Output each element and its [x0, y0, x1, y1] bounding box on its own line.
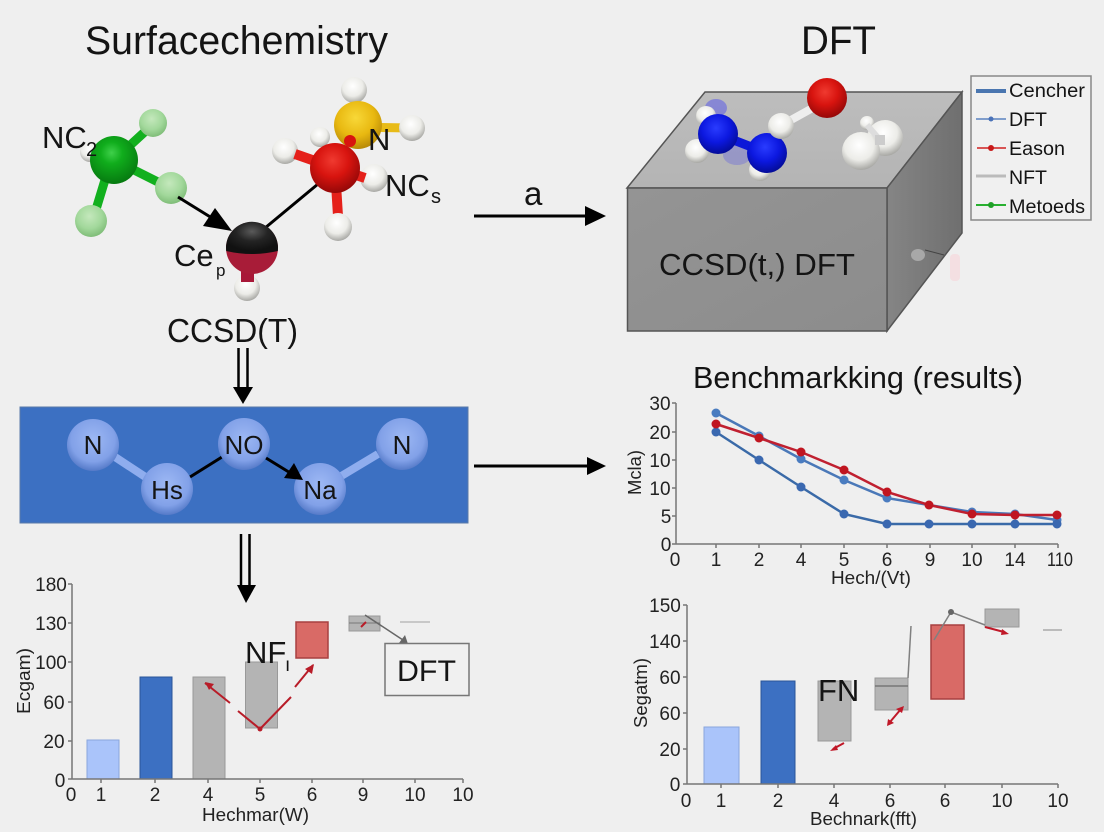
x tick labels: 10 — [404, 785, 426, 806]
faint pink mark — [950, 254, 960, 281]
red arrows: from bar 5 — [205, 622, 366, 732]
y tick labels: 60 — [659, 704, 681, 725]
x tick labels: 4 — [203, 785, 214, 806]
label: NCs: NC — [385, 168, 430, 203]
x tick labels: 2 — [754, 550, 764, 571]
x tick labels: 0 — [670, 550, 680, 571]
y tick labels: 30 — [649, 394, 671, 415]
atom: N — [376, 418, 428, 470]
title: Surfacechemistry: Surfacechemistry — [85, 19, 388, 63]
y tick labels: 20 — [659, 740, 681, 761]
line chart: benchmarking results — [625, 394, 1073, 588]
bar chart: Bechnark — [631, 596, 1069, 829]
axes — [683, 605, 1058, 788]
atom: NO: NO — [224, 430, 264, 460]
y tick labels: 0 — [670, 775, 680, 796]
label: Cep: Ce — [174, 238, 214, 273]
y tick labels: 60 — [43, 693, 65, 714]
y tick labels: 5 — [661, 507, 671, 528]
y tick labels: 10 — [649, 451, 671, 472]
legend item: Metoeds — [976, 197, 1085, 218]
atom: NO — [218, 418, 270, 470]
legend — [971, 76, 1091, 220]
y tick labels — [35, 575, 67, 792]
molecule: surface chemistry ball-and-stick — [75, 77, 425, 301]
arrow: a, to DFT slab — [474, 175, 606, 226]
bond: black atom to red atom — [265, 184, 318, 228]
label: NC2: NC — [42, 120, 87, 155]
slab front face — [628, 188, 887, 331]
y tick labels: 60 — [659, 668, 681, 689]
axes — [672, 403, 1058, 548]
label: NC2: 2 — [86, 139, 97, 161]
legend item: Cencher: Cencher — [1009, 81, 1086, 102]
x tick labels — [66, 785, 474, 806]
y tick labels: 0 — [55, 771, 65, 792]
molecule: red and yellow group — [272, 77, 425, 241]
series: light blue — [712, 408, 1062, 524]
x tick labels: 1 — [716, 791, 726, 812]
label: NF: ı — [285, 655, 290, 676]
x tick labels: 5 — [839, 550, 849, 571]
series: red — [712, 420, 1062, 520]
x tick labels: 10 — [961, 550, 983, 571]
x tick labels: 6 — [940, 791, 950, 812]
atom: Hs — [141, 463, 193, 515]
x tick labels: 4 — [829, 791, 840, 812]
axes — [68, 584, 463, 783]
molecule: black and crimson atom — [226, 222, 278, 301]
y tick labels — [649, 394, 671, 556]
x tick labels: 5 — [255, 785, 265, 806]
y tick labels — [649, 596, 681, 796]
label: NF: NF — [245, 635, 286, 670]
arrow: blue panel to line chart — [474, 457, 606, 475]
x tick labels: 10 — [452, 785, 474, 806]
molecule: blue with red oxygen — [685, 78, 847, 181]
heading: Benchmarkking (results): Benchmarkking (results) — [693, 360, 1023, 395]
x tick labels — [681, 791, 1069, 812]
slab top face — [627, 92, 962, 188]
callout: DFT: DFT — [397, 655, 456, 688]
callout: DFT — [365, 615, 469, 696]
legend item: DFT — [976, 110, 1047, 131]
atom: Na: Na — [303, 475, 337, 505]
y axis title: Mcla) — [625, 450, 645, 495]
connector lines — [908, 609, 985, 678]
label: FN: FN — [818, 673, 859, 708]
label: a: a — [524, 175, 543, 212]
molecule: green group — [75, 109, 187, 237]
label: NCs: s — [431, 186, 441, 208]
bar chart: Hechmar — [14, 575, 474, 825]
atom: Na — [294, 463, 346, 515]
label: CCSD(t,) DFT: CCSD(t,) DFT — [659, 247, 855, 282]
x tick labels: 9 — [358, 785, 368, 806]
legend item: Metoeds: Metoeds — [1009, 197, 1085, 218]
y tick labels: 20 — [43, 732, 65, 753]
slab right face — [887, 92, 962, 331]
y axis title: Segatm) — [631, 658, 651, 728]
x tick labels: 14 — [1004, 550, 1026, 571]
atom: N: N — [84, 430, 102, 460]
legend item: Cencher — [976, 81, 1086, 102]
molecule: white cluster — [842, 116, 903, 170]
atom: N: N — [393, 430, 411, 460]
label: NCs — [385, 168, 441, 208]
x axis title: Hech/(Vt) — [831, 568, 911, 588]
x tick labels: 4 — [796, 550, 807, 571]
y tick labels: 100 — [35, 653, 67, 674]
x tick labels: 110 — [1047, 550, 1073, 571]
x tick labels: 10 — [991, 791, 1013, 812]
x axis title: Hechmar(W) — [202, 805, 309, 825]
y axis title: Ecgam) — [14, 648, 34, 714]
y tick labels: 0 — [661, 535, 671, 556]
y tick labels: 150 — [649, 596, 681, 617]
y tick labels: 130 — [35, 614, 67, 635]
panel: blue reaction path — [20, 407, 468, 523]
y tick labels: 10 — [649, 479, 671, 500]
x tick labels: 6 — [885, 791, 895, 812]
x tick labels: 1 — [711, 550, 721, 571]
x tick labels: 6 — [882, 550, 892, 571]
label: CCSD(T): CCSD(T) — [167, 312, 298, 349]
x tick labels: 2 — [773, 791, 783, 812]
atom: Hs: Hs — [151, 475, 183, 505]
arrow: green group to black atom — [178, 197, 232, 231]
series: dark blue — [712, 428, 1062, 528]
x tick labels: 10 — [1047, 791, 1069, 812]
x tick labels — [670, 550, 1073, 571]
label: Cep: p — [216, 261, 225, 280]
x tick labels: 0 — [66, 785, 76, 806]
label: NC2 — [42, 120, 97, 161]
x tick labels: 1 — [96, 785, 106, 806]
x tick labels: 9 — [925, 550, 935, 571]
double arrow: blue panel to bar chart — [237, 534, 256, 603]
panel: DFT slab — [627, 78, 962, 331]
legend item: DFT: DFT — [1009, 110, 1047, 131]
arrowhead: NO to Na — [284, 463, 303, 480]
bars — [704, 609, 1062, 784]
y tick labels: 20 — [649, 423, 671, 444]
label: Cep — [174, 238, 225, 280]
double arrow: CCSD(T) to blue panel — [233, 348, 253, 404]
label: N: N — [368, 122, 390, 157]
y tick labels: 180 — [35, 575, 67, 596]
bonds — [112, 454, 378, 480]
x tick labels: 2 — [150, 785, 160, 806]
red arrows — [830, 627, 1009, 751]
title: DFT: DFT — [801, 19, 876, 63]
x axis title: Bechnark(fft) — [810, 809, 917, 829]
x tick labels: 0 — [681, 791, 691, 812]
y tick labels: 140 — [649, 632, 681, 653]
atom: N — [67, 419, 119, 471]
smudge on right face — [911, 249, 944, 261]
legend item: Eason: Eason — [1009, 139, 1065, 160]
legend item: NFT — [976, 168, 1047, 189]
legend item: Eason — [977, 139, 1065, 160]
x tick labels: 6 — [307, 785, 317, 806]
bars — [87, 616, 430, 779]
legend item: NFT: NFT — [1009, 168, 1047, 189]
